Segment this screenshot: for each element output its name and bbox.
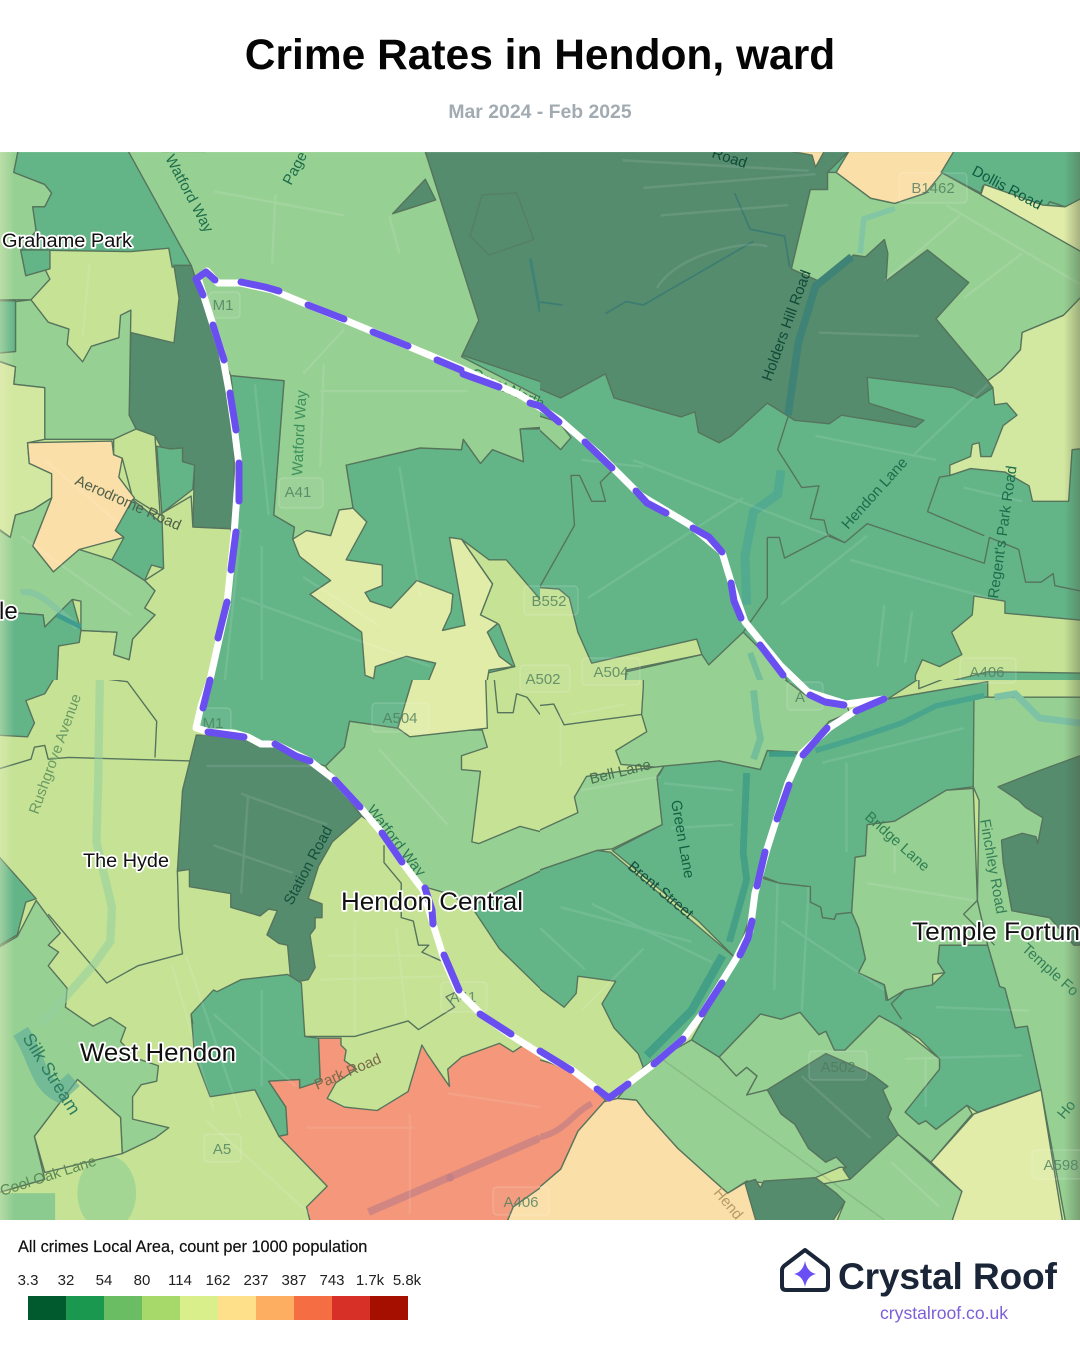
map regions: south-west: [0, 680, 540, 1220]
road number shields: A406: [969, 664, 1005, 681]
street labels: Watford Way: [363, 802, 429, 880]
legend title: All crimes Local Area, count per 1000 population: [18, 1238, 367, 1256]
street labels: Ho: [1054, 1097, 1079, 1123]
icon: house with star: [780, 1248, 830, 1292]
street labels: Park Road: [312, 1050, 384, 1094]
street labels: [0, 145, 1080, 1223]
street labels: Bell Lane: [588, 756, 653, 788]
legend scale values: 114: [168, 1272, 192, 1289]
legend scale values: 1.7k: [356, 1272, 384, 1289]
street labels: Rushgrove Avenue: [26, 692, 85, 816]
street labels: Brent Street: [624, 858, 697, 923]
street labels: Cool Oak Lane: [0, 1153, 98, 1200]
street labels: Silk Stream: [19, 1030, 84, 1118]
road number shields: A504: [382, 710, 418, 727]
legend colour bar: [28, 1296, 408, 1320]
street labels: Page: [280, 149, 311, 188]
legend scale values: 387: [281, 1272, 307, 1289]
road number shields: A502: [525, 671, 561, 688]
road number shields: M1: [203, 715, 223, 732]
ward boundary: purple dashes: [196, 272, 884, 1098]
legend scale values: 3.3: [18, 1272, 38, 1289]
road number shields: [200, 173, 1080, 1215]
street labels: Hend: [710, 1185, 746, 1223]
map regions: south-east: [537, 677, 1080, 1262]
street labels: Dollis Road: [969, 163, 1045, 214]
street labels: Great North: [468, 365, 547, 413]
street labels: Holders Hill Road: [759, 268, 815, 383]
street labels: Station Road: [281, 823, 336, 908]
street labels: Temple Fo: [1018, 940, 1080, 1000]
choropleth map: [0, 152, 1080, 1220]
place labels: The Hyde: [83, 850, 169, 872]
road number shields: A502: [820, 1059, 856, 1076]
wordmark: Crystal Roof: [838, 1255, 1057, 1297]
legend scale values: 32: [58, 1272, 74, 1289]
place labels: [0, 231, 1080, 1067]
website url: crystalroof.co.uk: [880, 1303, 1008, 1323]
place labels: Hendon Central: [341, 888, 523, 916]
road number shields: B552: [531, 593, 567, 610]
street labels: Green Lane: [667, 799, 698, 880]
map regions: north-east: [540, 152, 1080, 680]
road number shields: A598: [1043, 1157, 1079, 1174]
ward boundary: white line: [196, 271, 884, 1098]
edge shading: [0, 152, 1080, 1220]
road number shields: A41: [450, 989, 476, 1006]
street labels: Bridge Lane: [861, 808, 933, 875]
logo: Crystal Roof: [780, 1248, 1057, 1323]
legend: [18, 1238, 422, 1320]
road number shields: A41: [285, 484, 311, 501]
legend scale values: 80: [134, 1272, 150, 1289]
legend scale values: 162: [205, 1272, 231, 1289]
place labels: West Hendon: [80, 1039, 236, 1067]
legend scale values: 5.8k: [393, 1272, 421, 1289]
road number shields: M1: [213, 297, 233, 314]
street labels: Finchley Road: [976, 818, 1009, 915]
street labels: Road: [710, 145, 749, 172]
road number shields: A406: [503, 1194, 539, 1211]
title: Crime Rates in Hendon, ward: [245, 32, 835, 79]
place labels: Grahame Park: [2, 231, 133, 252]
street labels: Watford Way: [289, 389, 310, 476]
street labels: Regent's Park Road: [985, 465, 1021, 600]
street labels: Watford Way: [161, 152, 217, 236]
street labels: Hendon Lane: [838, 454, 911, 533]
legend scale values: 237: [243, 1272, 269, 1289]
road number shields: A: [795, 689, 805, 706]
road number shields: A504: [593, 664, 629, 681]
legend scale values: 743: [319, 1272, 345, 1289]
legend scale values: [18, 1272, 422, 1289]
street labels: Aerodrome Road: [72, 472, 184, 534]
legend scale values: 54: [96, 1272, 112, 1289]
subtitle: date range: Mar 2024 - Feb 2025: [448, 101, 632, 123]
road number shields: A5: [213, 1141, 231, 1158]
road number shields: B1462: [911, 180, 955, 197]
map regions: north-west: [0, 152, 540, 680]
place labels: Temple Fortun: [912, 918, 1080, 946]
